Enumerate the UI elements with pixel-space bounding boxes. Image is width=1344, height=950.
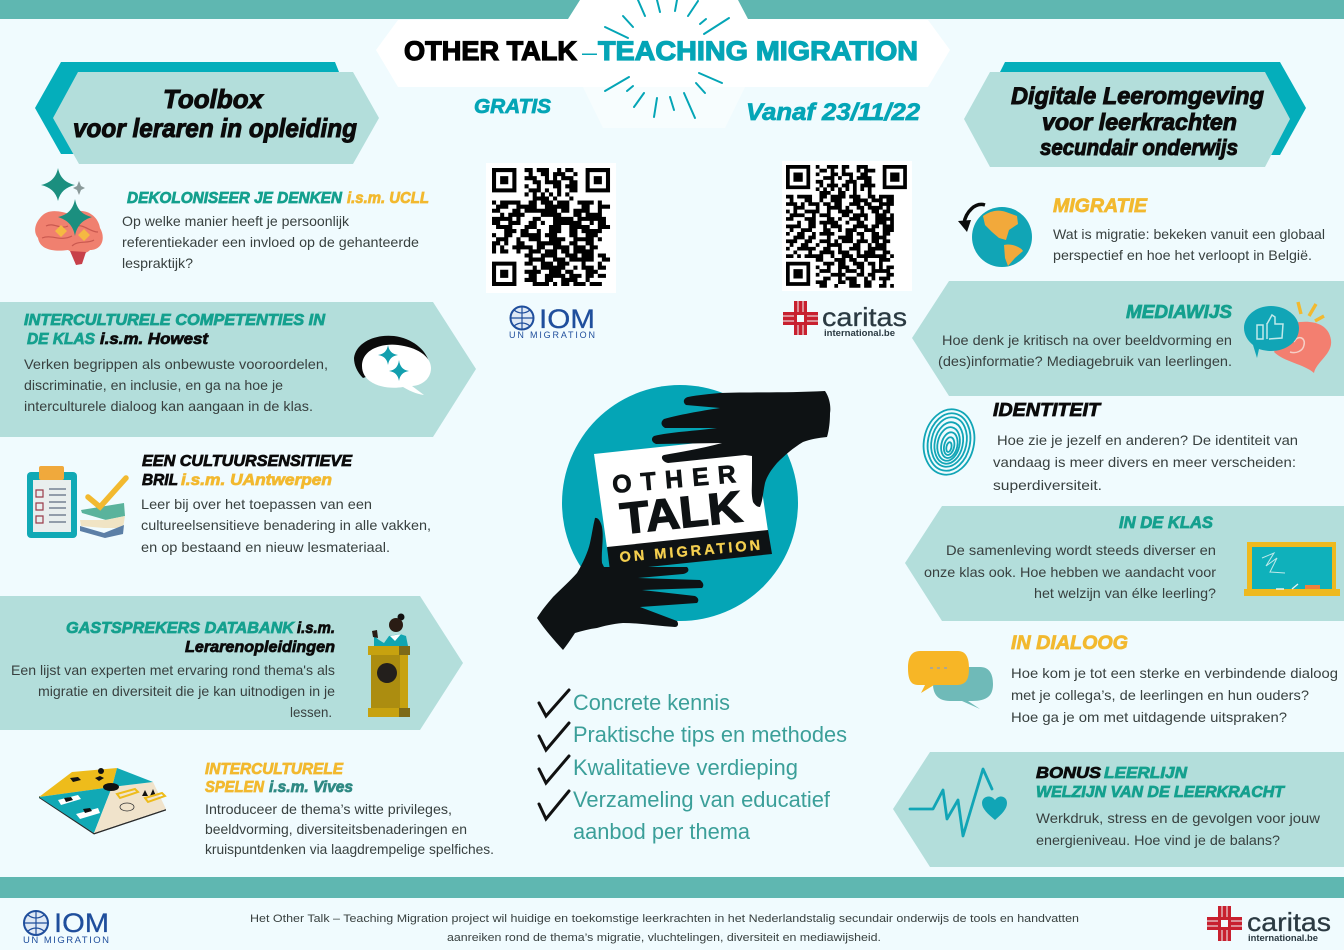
logo text <box>611 460 761 566</box>
left block: dekoloniseer je denken <box>35 168 429 271</box>
heading <box>205 761 353 796</box>
body text: Introduceer de thema’s witte privileges, <box>205 801 452 817</box>
icon: chat bubbles <box>908 651 993 709</box>
body text: vandaag is meer divers en meer verscheiden: <box>993 454 1296 470</box>
QR code: gratis toolbox <box>486 163 616 293</box>
body text: migratie en diversiteit die je kan uitnodigen in je <box>38 683 335 699</box>
body text: beeldvorming, diversiteitsbenaderingen en <box>205 821 467 837</box>
header: toolbox: Toolbox <box>163 84 265 114</box>
body text: kruispuntdenken via laagdrempelige spelfiches. <box>205 841 494 857</box>
heading: MIGRATIE <box>1053 196 1148 217</box>
icon: speaker at lectern <box>368 614 410 717</box>
heading: i.s.m. Howest <box>100 331 209 348</box>
label: gratis: GRATIS <box>474 96 552 118</box>
title text: TEACHING MIGRATION <box>598 36 918 66</box>
checklist <box>539 690 847 844</box>
body text: De samenleving wordt steeds diverser en <box>946 542 1216 558</box>
body text: (des)informatie? Mediagebruik van leerlingen. <box>938 353 1232 369</box>
icon: chalkboard <box>1244 542 1340 596</box>
logo: caritas: international.be <box>824 328 895 338</box>
hand: upper right <box>652 391 830 507</box>
icon: heartbeat <box>910 769 1007 836</box>
logo: IOM: UN MIGRATION <box>509 330 595 340</box>
heading: EEN CULTUURSENSITIEVE <box>142 453 353 470</box>
body text: Hoe zie je jezelf en anderen? De identiteit van <box>997 432 1298 448</box>
logo: other talk on migration <box>537 385 830 650</box>
body text: Leer bij over het toepassen van een <box>141 496 372 512</box>
panel: gastsprekers databank <box>0 596 463 730</box>
right block: in dialoog <box>908 633 1338 725</box>
heading: DEKOLONISEER JE DENKEN <box>127 190 342 207</box>
body text <box>205 801 494 857</box>
heading: IDENTITEIT <box>993 400 1102 420</box>
logo: IOM: IOM <box>539 304 595 334</box>
body text: perspectief en hoe het verloopt in België. <box>1053 247 1312 263</box>
checklist text <box>573 690 847 844</box>
footer logo: caritas <box>1207 906 1331 943</box>
footer logo: IOM: IOM <box>54 908 109 938</box>
heading: MEDIAWIJS <box>1126 302 1232 322</box>
body text <box>938 332 1232 369</box>
body text <box>122 213 419 271</box>
label: start date: Vanaf 23/11/22 <box>746 99 921 126</box>
logo: caritas: caritas <box>822 302 907 332</box>
body text: Hoe ga je om met uitdagende uitspraken? <box>1011 709 1287 725</box>
heading: WELZIJN VAN DE LEERKRACHT <box>1036 784 1285 801</box>
header: digitale leeromgeving: secundair onderwijs <box>1040 135 1238 160</box>
body text: Op welke manier heeft je persoonlijk <box>122 213 350 229</box>
heading <box>66 620 335 656</box>
header: digitale leeromgeving: voor leerkrachten <box>1042 109 1237 135</box>
title banner <box>376 0 950 128</box>
logo text: OTHER <box>611 460 737 499</box>
body text: cultureelsensitieve benadering in alle vakken, <box>141 517 431 533</box>
body text <box>1053 226 1325 263</box>
panel: bonus leerlijn <box>893 752 1344 867</box>
left block: cultuursensitieve bril <box>27 453 431 555</box>
white card <box>594 437 768 548</box>
header: digitale leeromgeving <box>964 62 1306 167</box>
body text: Wat is migratie: bekeken vanuit een globaal <box>1053 226 1325 242</box>
heading: SPELEN <box>205 779 264 796</box>
icon: speech bubble with sparkles <box>354 336 431 395</box>
bottom band <box>0 877 1344 898</box>
icon: globe with arrow <box>958 204 1032 267</box>
body text <box>1036 810 1321 848</box>
heading: INTERCULTURELE COMPETENTIES IN <box>24 312 325 329</box>
checklist text: Concrete kennis <box>573 690 730 715</box>
black band <box>607 530 772 571</box>
left block: interculturele spelen <box>39 761 494 857</box>
body text <box>1011 665 1338 725</box>
body text: onze klas ook. Hoe hebben we aandacht voor <box>924 564 1216 580</box>
footer text <box>250 913 1079 944</box>
header: digitale leeromgeving: Digitale Leeromgeving <box>1011 83 1264 110</box>
header: toolbox <box>35 62 379 164</box>
title text <box>404 36 918 66</box>
logo: IOM <box>509 304 595 340</box>
heading <box>1036 765 1285 801</box>
heading: BONUS <box>1036 765 1101 782</box>
body text: lessen. <box>290 704 332 720</box>
body text <box>924 542 1216 601</box>
heading: IN DE KLAS <box>1119 513 1214 532</box>
body text: Verken begrippen als onbewuste vooroordelen, <box>24 356 328 372</box>
heading: LEERLIJN <box>1104 765 1187 782</box>
heading: DE KLAS <box>27 331 95 348</box>
body text: lespraktijk? <box>122 255 193 271</box>
footer logo: IOM: UN MIGRATION <box>23 935 109 946</box>
icon: clipboard with books <box>27 466 126 538</box>
checklist text: aanbod per thema <box>573 819 751 844</box>
icon: like and heart bubbles <box>1244 302 1331 373</box>
logo text: ON MIGRATION <box>619 538 761 566</box>
footer text: Het Other Talk – Teaching Migration project wil huidige en toekomstige leerkrachten in het Nederlandstalig secundair onderwijs de tools en handvatten <box>250 913 1079 925</box>
panel: in de klas <box>905 506 1344 621</box>
heading <box>142 453 353 489</box>
heading: i.s.m. UAntwerpen <box>181 472 332 489</box>
body text <box>993 432 1298 493</box>
body text: het welzijn van élke leerling? <box>1034 585 1216 601</box>
body text: Hoe kom je tot een sterke en verbindende dialoog <box>1011 665 1338 681</box>
body text <box>141 496 431 555</box>
body text <box>11 662 335 720</box>
heading: GASTSPREKERS DATABANK <box>66 620 295 637</box>
heading <box>24 312 325 348</box>
body text: referentiekader een invloed op de gehanteerde <box>122 234 419 250</box>
check icons <box>539 690 569 819</box>
body text: superdiversiteit. <box>993 477 1102 493</box>
logo text: TALK <box>618 482 745 544</box>
header: toolbox: voor leraren in opleiding <box>73 113 357 143</box>
icon: brain with sparkles <box>35 168 103 265</box>
burst rays <box>605 0 729 118</box>
title text: OTHER TALK <box>404 36 578 66</box>
body text: discriminatie, en inclusie, en ga na hoe je <box>24 377 283 393</box>
logo: caritas <box>783 301 907 338</box>
icon: fingerprint <box>918 405 980 479</box>
body text: energieniveau. Hoe vind je de balans? <box>1036 832 1280 848</box>
footer logo: IOM <box>23 908 109 946</box>
footer logo: caritas: caritas <box>1247 907 1331 937</box>
body text: interculturele dialoog kan aangaan in de klas. <box>24 398 313 414</box>
top band <box>0 0 1344 19</box>
right block: migratie <box>958 196 1325 267</box>
panel: interculturele competenties <box>0 302 476 437</box>
checklist text: Verzameling van educatief <box>573 787 831 812</box>
body text: Hoe denk je kritisch na over beeldvorming en <box>942 332 1232 348</box>
heading: i.s.m. UCLL <box>347 190 429 207</box>
footer text: aanreiken rond de thema’s migratie, vluchtelingen, diversiteit en mediawijsheid. <box>447 932 881 944</box>
footer logo: caritas: international.be <box>1248 933 1318 943</box>
heading: IN DIALOOG <box>1011 633 1128 654</box>
heading: Lerarenopleidingen <box>185 639 335 656</box>
QR code: digitale leeromgeving <box>782 161 912 291</box>
title text: – <box>582 40 598 65</box>
heading: i.s.m. <box>297 620 335 637</box>
heading: INTERCULTURELE <box>205 761 344 778</box>
body text: Een lijst van experten met ervaring rond thema's als <box>11 662 335 678</box>
body text: en op bestaand en nieuw lesmateriaal. <box>141 539 390 555</box>
panel: mediawijs <box>912 281 1344 396</box>
heading: i.s.m. Vives <box>269 779 353 796</box>
icon: game board <box>39 768 166 834</box>
teal circle <box>562 385 798 621</box>
body text <box>24 356 328 414</box>
checklist text: Praktische tips en methodes <box>573 722 847 747</box>
body text: met je collega’s, de leerlingen en hun ouders? <box>1011 687 1309 703</box>
right block: identiteit <box>918 400 1298 493</box>
body text: Werkdruk, stress en de gevolgen voor jouw <box>1036 810 1321 826</box>
checklist text: Kwalitatieve verdieping <box>573 755 798 780</box>
heading: BRIL <box>142 472 178 489</box>
hand: lower left <box>537 518 703 650</box>
